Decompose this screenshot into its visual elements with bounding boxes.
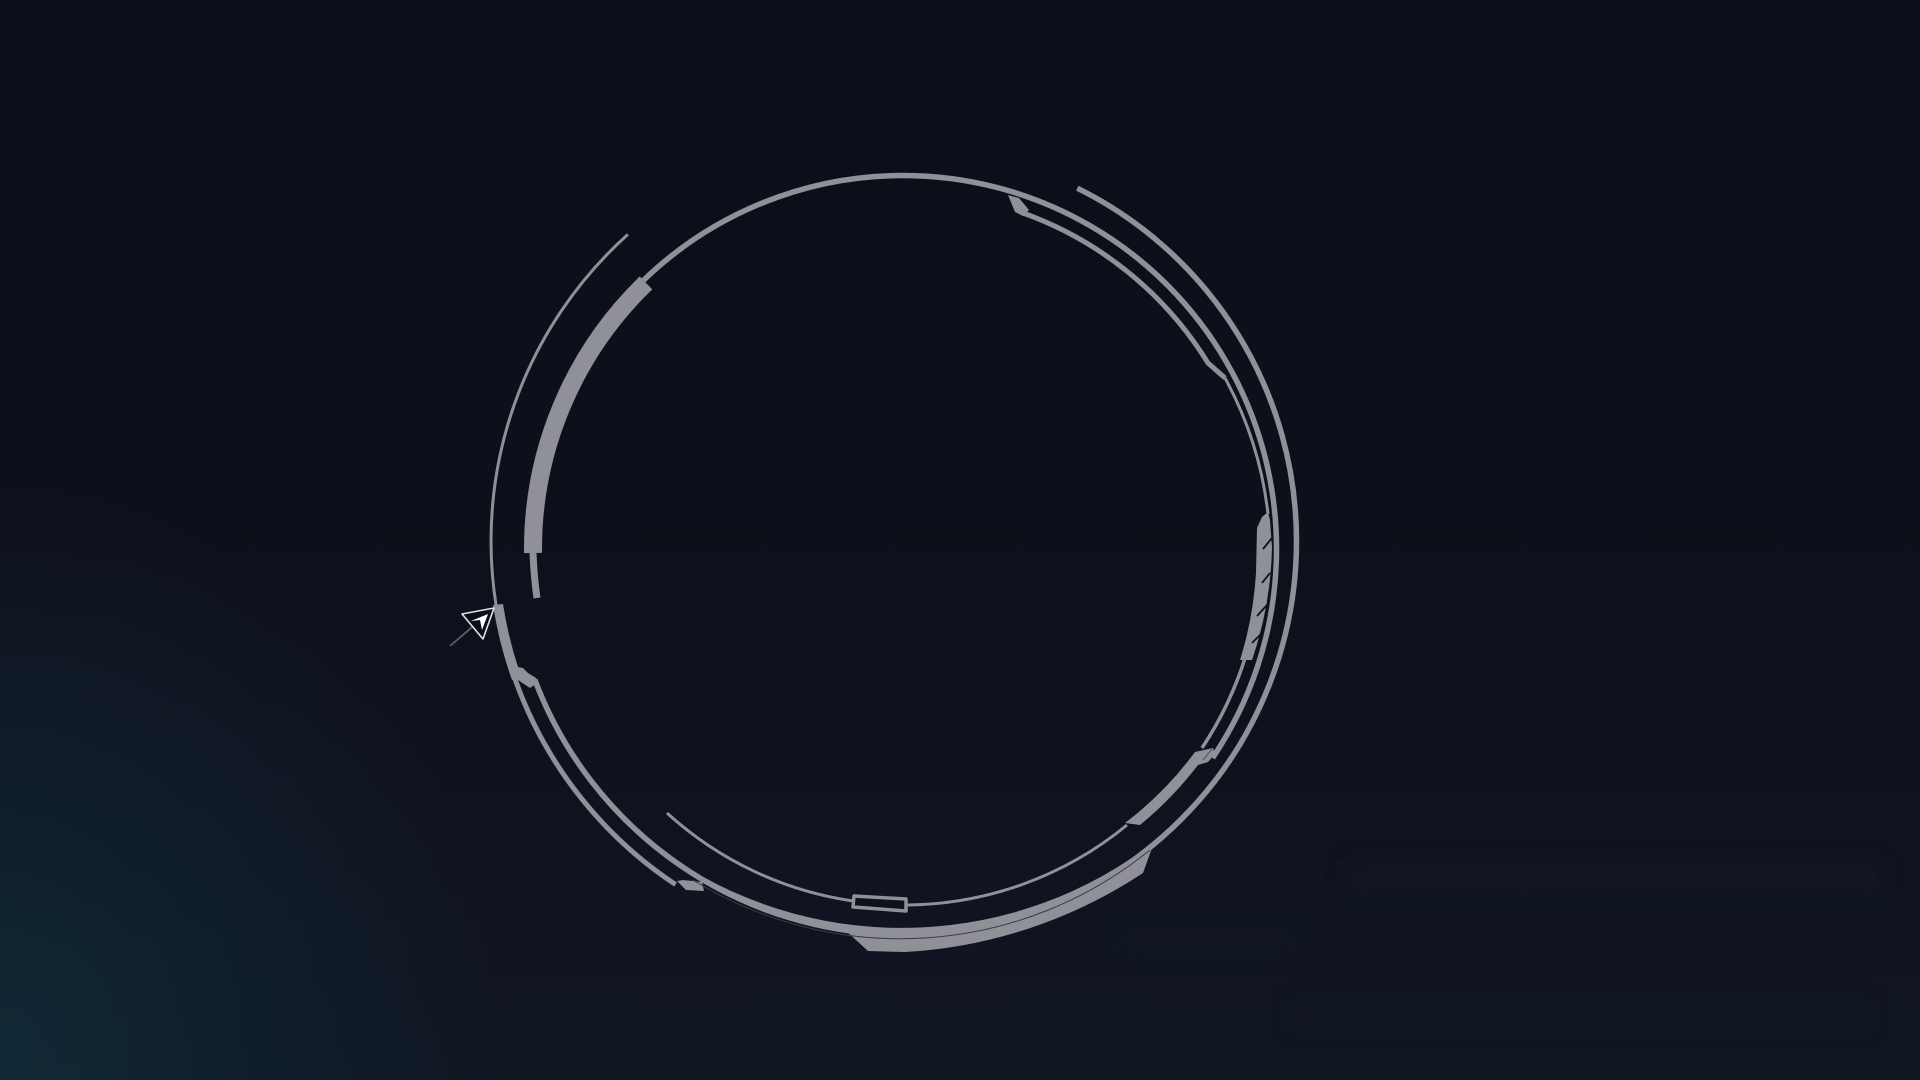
main ring arc: [644, 175, 1277, 758]
upper right inner strand: [1008, 195, 1268, 514]
cursor triangle: [462, 608, 494, 639]
outer left thin arc: [491, 234, 628, 606]
cursor tail: [450, 622, 478, 646]
cursor arrow icon: [450, 608, 494, 646]
inner bottom arc left: [667, 813, 853, 901]
left thin stub: [533, 553, 537, 598]
strand main arc: [1023, 213, 1225, 378]
faint ghost text blocks: [1120, 860, 1885, 1032]
strand start tab: [1008, 195, 1029, 216]
bottom thick segment: [848, 848, 1152, 952]
bottom dark hairline: [693, 850, 1150, 939]
lower right thick segment: [1125, 748, 1215, 825]
tick segment body: [1240, 512, 1272, 660]
inner bottom arc right: [907, 825, 1127, 905]
outer right and bottom arc: [535, 188, 1296, 934]
lower left kink tab: [677, 880, 704, 891]
right thick tick segment: [1240, 512, 1272, 660]
segment hairline: [1203, 749, 1212, 760]
right thin connector: [1202, 655, 1246, 748]
strand thin tail: [1225, 378, 1268, 514]
cursor inner mark: [471, 614, 488, 630]
left thick arc segment: [533, 283, 646, 553]
thicker bottom crescent of the outer arc: [678, 841, 1155, 932]
segment body: [1125, 748, 1215, 825]
inner arc rectangle marker: [853, 896, 906, 911]
lower left outer strand: [515, 679, 676, 885]
tick marks: [1252, 538, 1272, 643]
lower left thick connector: [493, 604, 536, 688]
